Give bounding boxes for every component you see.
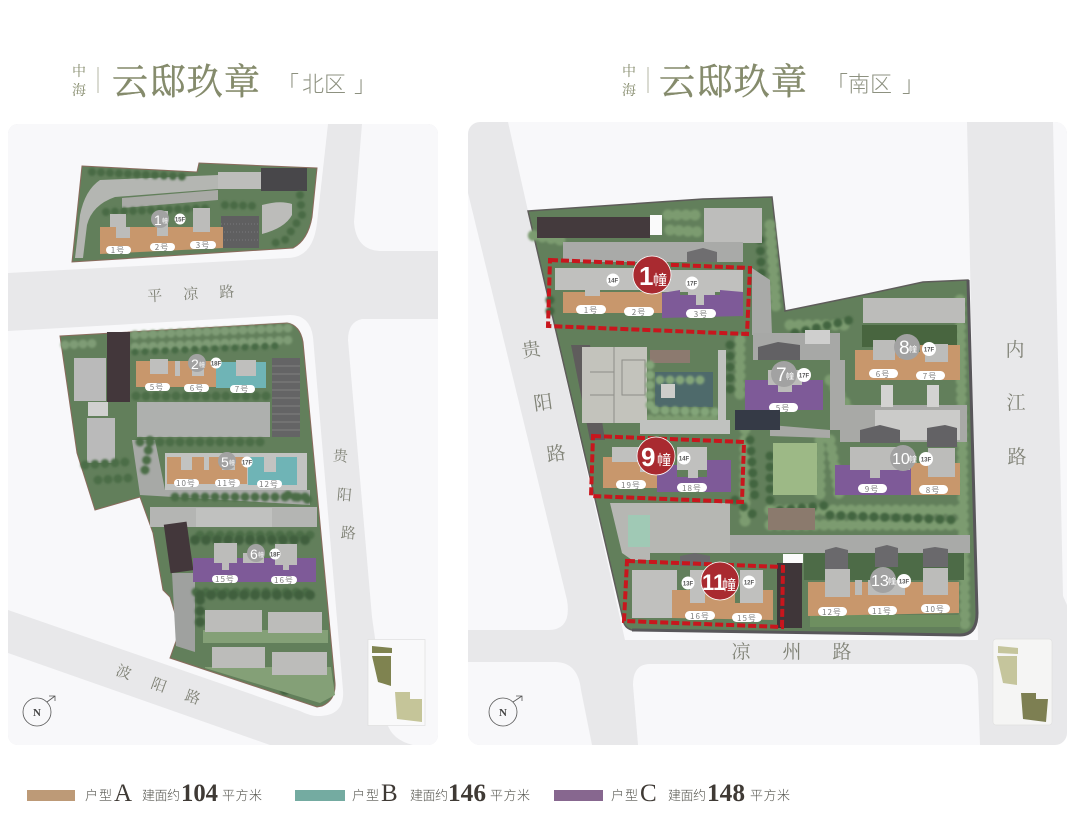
building 1 highlighted: 幢 — [653, 270, 667, 290]
road labels: south area — [520, 334, 1027, 664]
building 11 highlighted: 12F — [744, 580, 755, 586]
building 6: 幢 — [258, 550, 264, 559]
building 8: 6号 — [876, 369, 890, 380]
legend item: type B: 平方米 — [490, 785, 530, 804]
legend item: type A — [27, 780, 262, 807]
building 13 — [808, 567, 959, 618]
building 6 — [193, 543, 316, 586]
icon: south compass: N — [499, 707, 507, 719]
building 1: 15F — [175, 218, 186, 224]
road labels: south area: 路 — [832, 637, 852, 664]
building 5: 17F — [242, 460, 253, 466]
road labels: north area: 凉 — [183, 283, 200, 304]
legend item: type C: 平方米 — [750, 785, 790, 804]
building 1 highlighted — [548, 256, 750, 334]
inset key map: north — [368, 640, 425, 726]
title: south area — [622, 54, 924, 105]
building 10: 幢 — [909, 454, 917, 465]
building 11 highlighted: 幢 — [722, 575, 736, 595]
road labels: north area: 路 — [219, 281, 235, 302]
building 2: 幢 — [199, 360, 205, 369]
legend item: type B: 户型 — [352, 785, 379, 804]
legend item: type B: 建面约 — [410, 785, 448, 804]
legend — [27, 780, 790, 807]
building 8: 17F — [924, 348, 935, 354]
road labels: south area: 江 — [1006, 388, 1026, 415]
road labels: north area: 平 — [147, 285, 163, 306]
road labels: south area: 路 — [1007, 442, 1027, 469]
title: north area: 」 — [354, 67, 376, 99]
building 10: 13F — [921, 458, 932, 464]
road labels: north area: 路 — [340, 521, 357, 544]
road labels: south area: 贵 — [520, 334, 543, 363]
title: south area: 中 — [622, 61, 636, 81]
title: south area: 」 — [902, 67, 924, 99]
building 9 highlighted: 18号 — [682, 483, 702, 494]
title: south area: 南区 — [848, 67, 892, 99]
building 10: 10 — [892, 451, 910, 468]
building 5: 12号 — [259, 479, 279, 490]
legend item: type A: A — [114, 780, 132, 807]
building 11 highlighted: 16号 — [690, 611, 710, 622]
building 2: 7号 — [235, 384, 249, 395]
title: north area: 云邸玖章 — [112, 54, 260, 105]
building 1: 3号 — [196, 240, 210, 251]
legend item: type C — [554, 780, 790, 807]
building 1: 幢 — [162, 216, 168, 225]
building 2: 6号 — [190, 383, 204, 394]
legend item: type C: 建面约 — [668, 785, 706, 804]
legend item: type C: C — [640, 780, 657, 807]
building 13: 10号 — [925, 604, 945, 615]
building 5: 幢 — [229, 458, 235, 467]
building 11 highlighted — [624, 561, 783, 627]
legend item: type C: 户型 — [611, 785, 638, 804]
building 2: 18F — [211, 362, 222, 368]
title: north area — [72, 54, 376, 105]
building 1 highlighted: 14F — [608, 278, 619, 284]
building 1: 1号 — [111, 245, 125, 256]
road labels: south area: 凉 — [731, 637, 751, 664]
icon: south compass — [489, 696, 522, 726]
building 2: 5号 — [150, 382, 164, 393]
building 9 highlighted: 19号 — [621, 480, 641, 491]
title: south area: 海 — [622, 80, 636, 100]
road labels: south area: 内 — [1005, 335, 1025, 362]
building 5 — [165, 452, 307, 490]
site: south plot — [528, 197, 977, 635]
building 8: 7号 — [923, 371, 937, 382]
building 5: 5 — [221, 454, 229, 470]
building 8: 幢 — [909, 344, 917, 355]
building 11 highlighted: 11 — [702, 570, 725, 595]
road labels: north area: 路 — [182, 684, 204, 709]
building 1 highlighted: 3号 — [694, 309, 708, 320]
building 1 highlighted: 1号 — [584, 305, 598, 316]
building 1: 1 — [154, 212, 162, 228]
road labels: south area: 路 — [545, 438, 567, 467]
title: north area: 北区 — [302, 67, 346, 99]
icon: north compass: N — [33, 707, 41, 719]
building 5: 11号 — [217, 478, 237, 489]
legend item: type A: 104 — [181, 780, 218, 807]
building 13: 13F — [899, 580, 910, 586]
legend item: type A: 户型 — [85, 785, 112, 804]
site: north plot bottom — [60, 323, 335, 707]
building 7: 5号 — [776, 403, 790, 414]
legend item: type B: B — [381, 780, 398, 807]
road labels: north area: 阳 — [336, 483, 353, 506]
building 1 highlighted: 2号 — [632, 307, 646, 318]
road labels: north area: 贵 — [332, 444, 350, 467]
road labels: north area — [113, 281, 357, 709]
road labels: north area: 阳 — [148, 672, 170, 697]
building 5: 10号 — [176, 478, 196, 489]
building 1 highlighted: 1 — [639, 261, 653, 291]
title: north area: 中 — [72, 61, 86, 81]
building 8: 8 — [899, 338, 910, 359]
building 9 highlighted: 9 — [641, 442, 655, 472]
building 10: 9号 — [865, 484, 879, 495]
building 9 highlighted — [591, 436, 744, 502]
inset key map: south — [993, 639, 1052, 725]
building 13: 13 — [871, 573, 889, 590]
building 11 highlighted: 13F — [683, 582, 694, 588]
building 9 highlighted: 14F — [679, 456, 690, 462]
building 7 — [735, 361, 823, 430]
title: north area: 「 — [277, 67, 299, 99]
panel: north area map — [8, 124, 438, 745]
building 10: 8号 — [926, 485, 940, 496]
title: south area: 「 — [826, 67, 848, 99]
title: south area: 云邸玖章 — [659, 54, 807, 105]
legend item: type B — [295, 780, 530, 807]
building 10 — [835, 445, 960, 496]
legend item: type B: 146 — [448, 780, 486, 807]
building 6: 6 — [250, 546, 258, 562]
building 7: 17F — [799, 374, 810, 380]
legend item: type A: 平方米 — [222, 785, 262, 804]
building 2: 2 — [191, 356, 199, 372]
site: north plot top — [72, 163, 317, 262]
title: north area: 海 — [72, 80, 86, 100]
building 9 highlighted: 幢 — [657, 450, 671, 470]
building 13: 12号 — [822, 607, 842, 618]
building 7: 7 — [776, 365, 787, 386]
icon: north compass — [23, 696, 55, 726]
road labels: south area: 州 — [782, 637, 802, 664]
road labels: north area: 波 — [113, 659, 135, 684]
building 6: 18F — [270, 552, 281, 558]
building 13: 11号 — [872, 606, 892, 617]
building 11 highlighted: 15号 — [737, 613, 757, 624]
building 2 — [136, 354, 266, 395]
road labels: south area: 阳 — [532, 387, 554, 416]
building 6: 16号 — [274, 575, 294, 586]
clubhouse — [582, 347, 730, 434]
building 13: 幢 — [888, 576, 896, 587]
building 8 — [855, 298, 965, 382]
building 7: 幢 — [786, 371, 794, 382]
building 1 highlighted: 17F — [687, 282, 698, 288]
building 1: 2号 — [155, 242, 169, 253]
legend item: type A: 建面约 — [142, 785, 180, 804]
legend item: type C: 148 — [707, 780, 745, 807]
building 1 — [100, 208, 223, 256]
panel: south area map — [468, 122, 1067, 745]
building 6: 15号 — [215, 574, 235, 585]
